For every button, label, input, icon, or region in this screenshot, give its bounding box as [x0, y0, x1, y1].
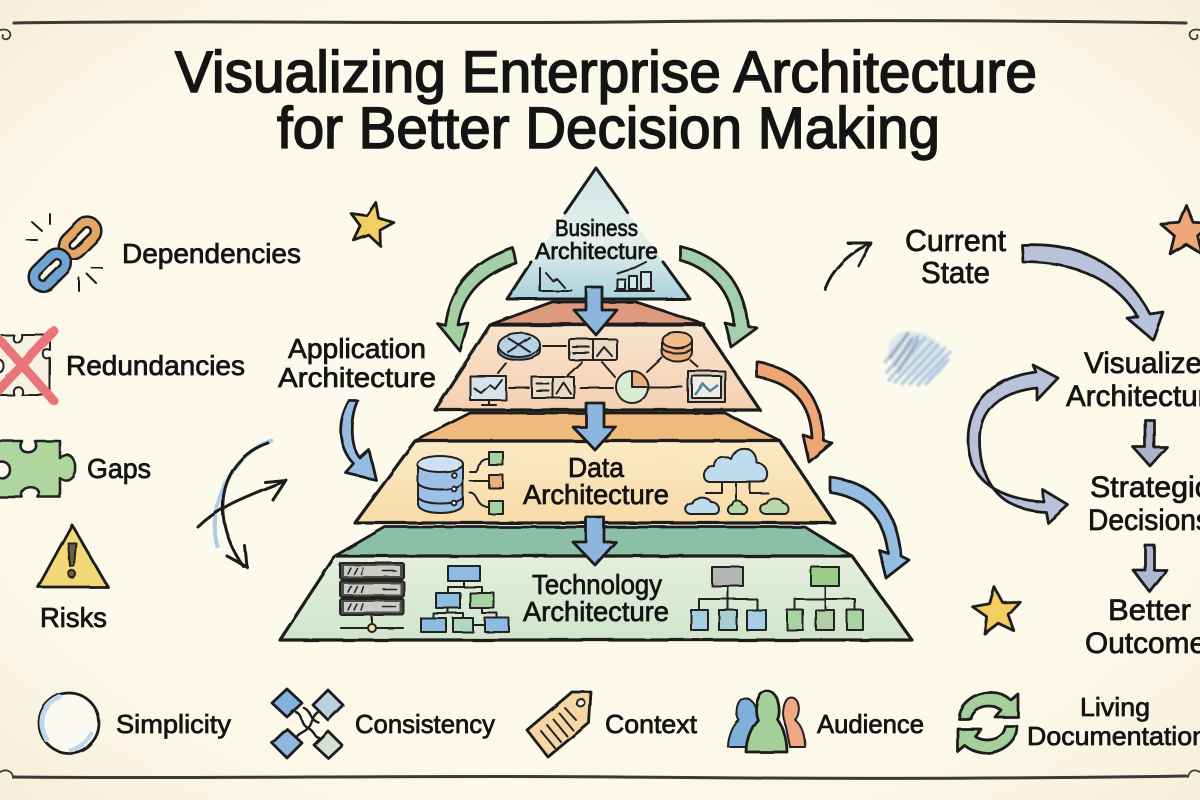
arrow: current state to visualize [1022, 245, 1163, 340]
label: Strategic Decisions [1088, 471, 1200, 537]
arrow: blue left [341, 401, 376, 480]
pyramid [280, 168, 912, 640]
icon: yellow star top [346, 198, 397, 248]
icon: network tree [421, 566, 509, 632]
label: Current State: Current [905, 223, 1006, 258]
title [175, 40, 1037, 161]
label: Audience: Audience [817, 709, 924, 739]
arrow: crossed sketch arrows [198, 440, 286, 567]
decorative stars [346, 198, 1200, 635]
icon: green puzzle piece [0, 441, 75, 497]
arrow: application to data [573, 403, 616, 450]
arrow: green left [437, 248, 516, 351]
title: for Better Decision Making [277, 96, 940, 161]
label: Business Architecture: Architecture [535, 238, 658, 264]
icon: price tag [527, 692, 591, 757]
tier: technology architecture [280, 527, 912, 640]
label: Application Architecture [278, 333, 436, 393]
label: Technology Architecture: Technology [532, 569, 662, 600]
arrow: blue right [830, 477, 909, 578]
label: Data Architecture: Data [568, 452, 624, 483]
label: Business Architecture: Business [555, 215, 638, 241]
icon: circle [39, 693, 99, 753]
icon: monitor [470, 376, 506, 405]
icon: green org tree [787, 567, 863, 630]
icon: chart panel [532, 377, 574, 398]
label: Current State: State [921, 255, 990, 290]
icon: cloud network [685, 449, 789, 514]
icon: dashboard [569, 339, 617, 360]
arrow: feedback loop [968, 365, 1068, 523]
arrow: green right [680, 246, 757, 347]
arrow: small black up-right [825, 243, 871, 289]
label: Risks: Risks [40, 602, 107, 633]
curved side arrows [198, 243, 1167, 592]
icon: chain link [27, 214, 102, 291]
label: Context: Context [605, 709, 698, 739]
icon: orange database [662, 332, 692, 361]
label: Simplicity: Simplicity [116, 709, 231, 739]
label: Living Documentation: Living [1080, 692, 1150, 722]
label: Better Outcomes: Better [1108, 594, 1191, 627]
icon: grey org tree [691, 567, 766, 630]
arrow: visualize to decisions [1133, 420, 1167, 466]
arrow: business to application [574, 287, 617, 335]
icon: linked diamonds [272, 689, 343, 758]
left column icons [0, 214, 108, 587]
icon: crossed-out puzzle piece [0, 331, 54, 401]
label: Visualize Architecture [1066, 347, 1200, 413]
tier: business architecture [507, 168, 690, 299]
arrow: decisions to outcomes [1133, 545, 1167, 592]
icon: rising bar chart [615, 262, 654, 291]
label: Better Outcomes [1085, 594, 1200, 660]
icon: audience people [728, 691, 805, 752]
icon: orange star [1160, 205, 1200, 254]
icon: refresh cycle [958, 693, 1018, 753]
icon: yellow star bottom [971, 585, 1023, 635]
pencil scribble [881, 322, 953, 388]
arrow: data to technology [573, 517, 616, 565]
arrow: orange [757, 362, 832, 462]
icon: warning triangle [38, 525, 108, 587]
icon: pie chart [616, 371, 648, 403]
tier: data architecture [355, 413, 835, 523]
label: Consistency: Consistency [355, 709, 495, 739]
label: Living Documentation: Documentation [1027, 721, 1200, 751]
label: Technology Architecture [523, 569, 669, 627]
label: Redundancies: Redundancies [66, 350, 245, 381]
icon: framed chart [688, 371, 725, 402]
bottom row icons [39, 689, 1018, 758]
label: Gaps: Gaps [87, 453, 151, 484]
icon: database [417, 456, 463, 513]
icon connections [498, 346, 698, 388]
label: Living Documentation [1027, 692, 1200, 751]
icon: falling line chart [540, 268, 572, 291]
label: Application Architecture: Application [288, 333, 426, 364]
tier: application architecture [435, 302, 760, 410]
label: Current State [905, 223, 1006, 290]
label: Technology Architecture: Architecture [523, 596, 669, 627]
label: Business Architecture [535, 215, 658, 264]
label: Data Architecture [523, 452, 669, 510]
label: Dependencies: Dependencies [122, 238, 301, 269]
title: Visualizing Enterprise Architecture [175, 40, 1037, 105]
label: Data Architecture: Architecture [523, 479, 669, 510]
icon: router [498, 333, 540, 360]
label: Visualize Architecture: Visualize [1084, 347, 1200, 380]
icon: server rack [340, 563, 404, 632]
label: Application Architecture: Architecture [278, 362, 436, 393]
icon: data squares [470, 452, 503, 514]
